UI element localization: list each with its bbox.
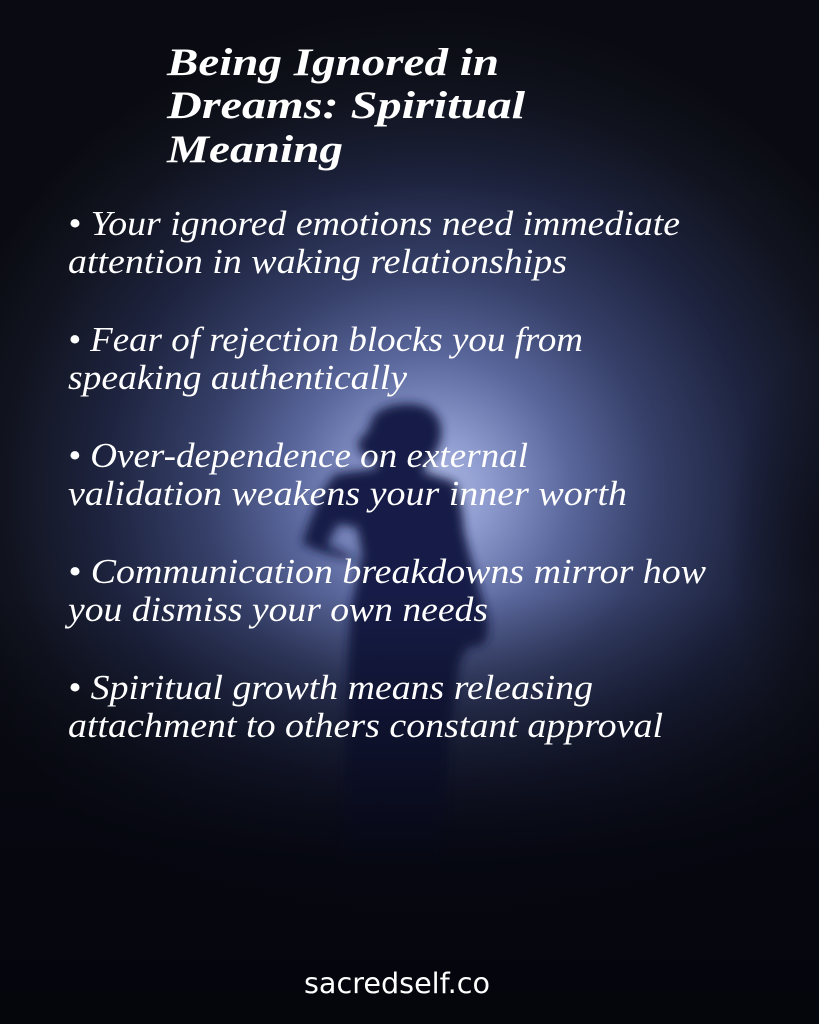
bullet 2: • Fear of rejection blocks you from (68, 320, 583, 359)
bullet 5 (68, 668, 663, 745)
bullet 5: • Spiritual growth means releasing (68, 668, 593, 707)
bullet 4 (65, 552, 707, 629)
bullet 2 (68, 320, 583, 397)
bullet 1: attention in waking relationships (68, 242, 567, 281)
title: Being Ignored in (166, 41, 499, 84)
bullet 4: • Communication breakdowns mirror how (68, 552, 707, 591)
bullet 5: attachment to others constant approval (68, 706, 663, 745)
silhouette figure (302, 404, 488, 860)
title (166, 41, 525, 171)
bullet 1: • Your ignored emotions need immediate (68, 204, 680, 243)
bullet 3: • Over-dependence on external (68, 436, 528, 475)
footer website: sacredself.co (304, 966, 490, 1000)
title: Dreams: Spiritual (166, 84, 525, 127)
bullet 3: validation weakens your inner worth (68, 474, 627, 513)
bullet 2: speaking authentically (68, 358, 407, 397)
title: Meaning (166, 128, 343, 171)
bullet 4: you dismiss your own needs (65, 590, 488, 629)
bullet 1 (68, 204, 680, 281)
bullet 3 (68, 436, 627, 513)
